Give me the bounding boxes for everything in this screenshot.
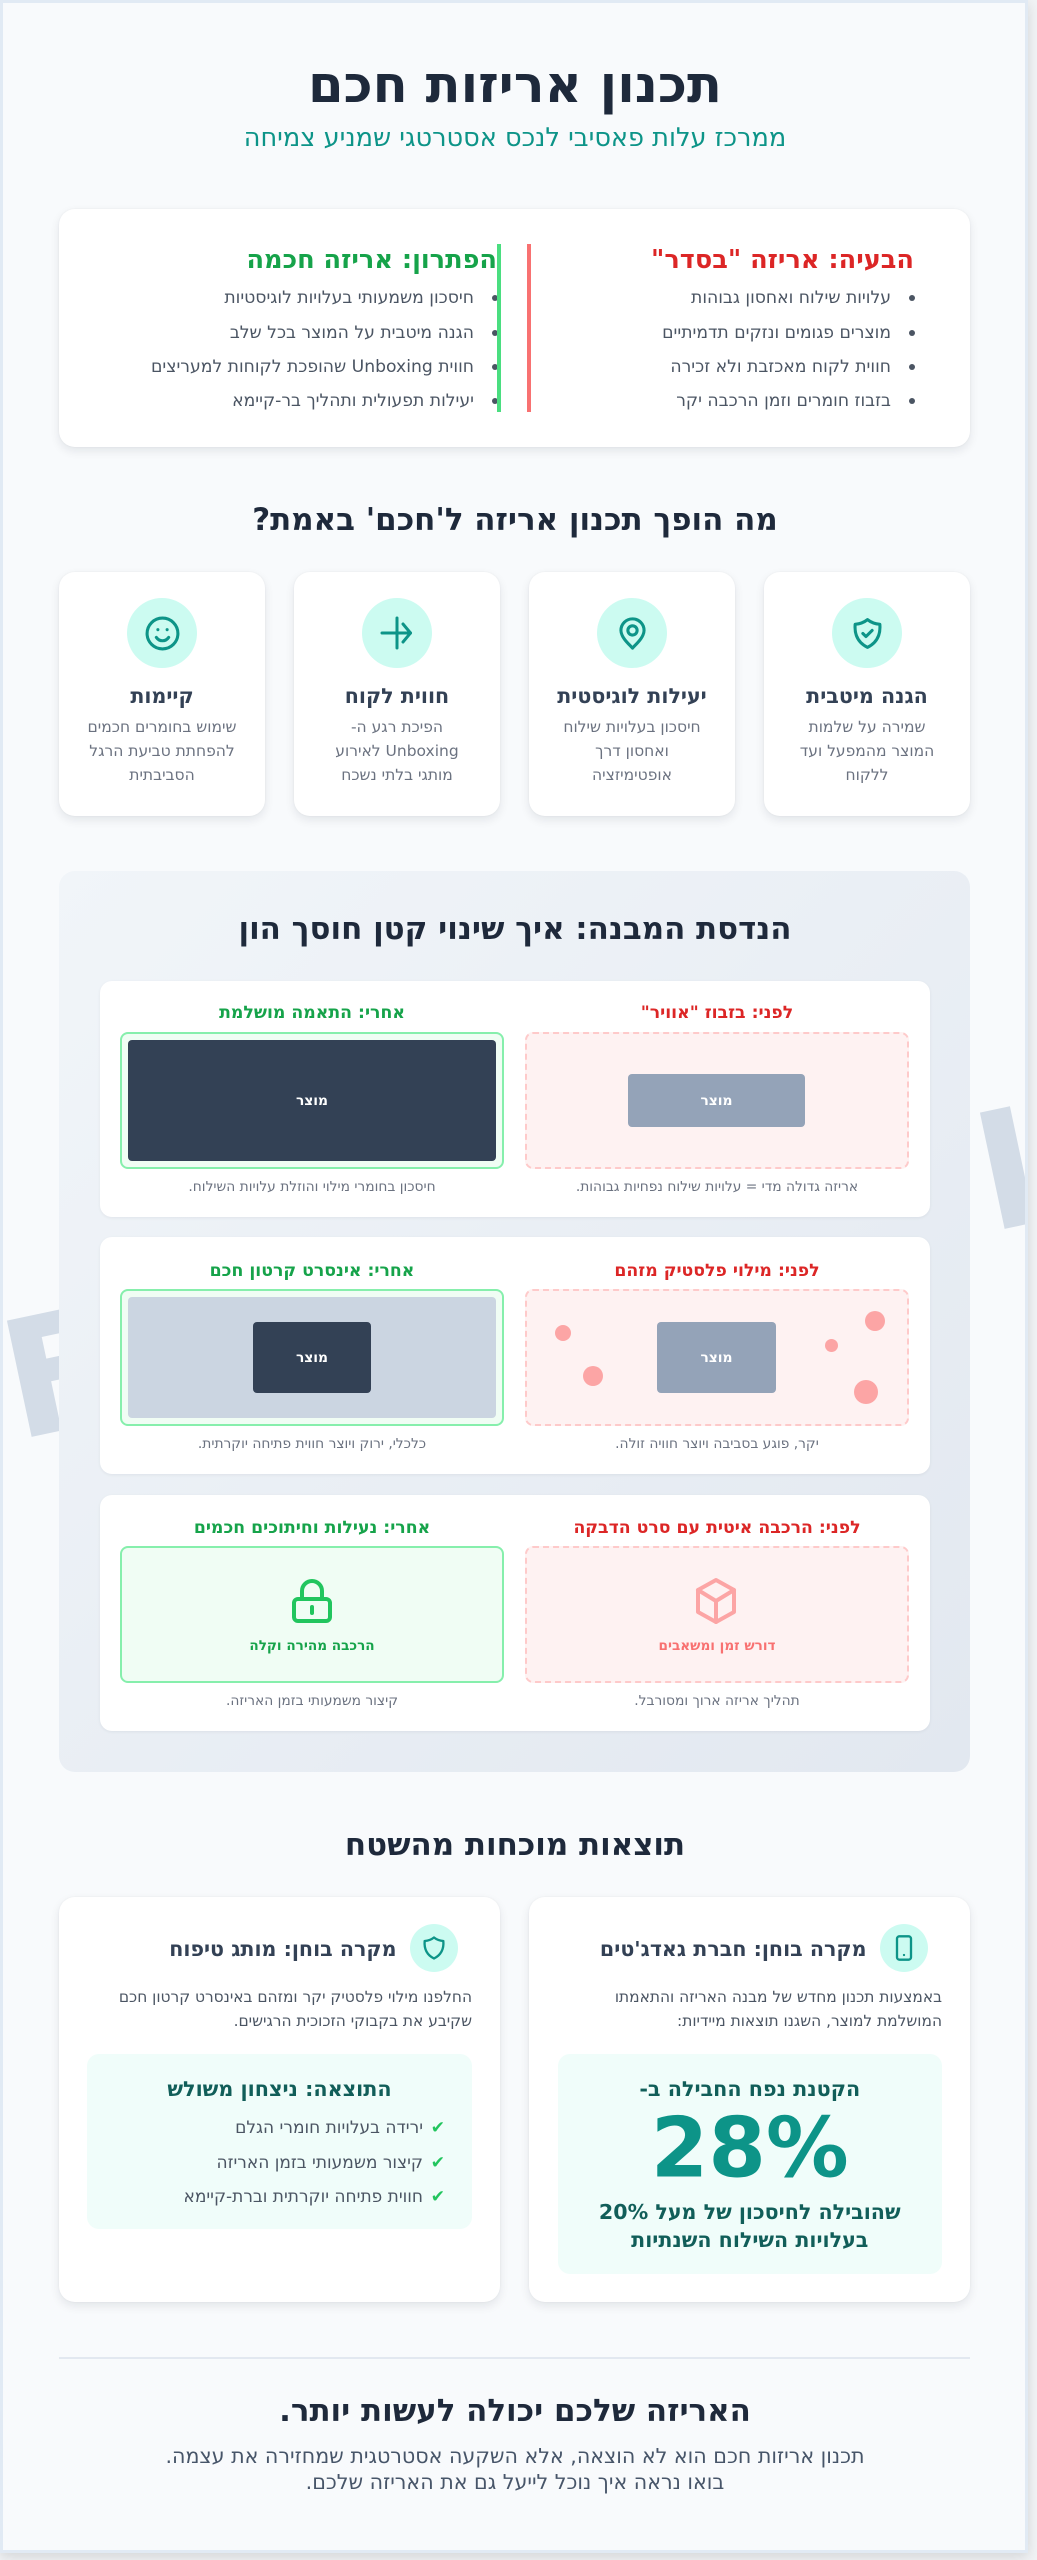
- title: תכנון אריזות חכם: [308, 55, 722, 115]
- card title: חווית לקוח: [345, 684, 449, 708]
- comparison row 3: [100, 1495, 930, 1732]
- divider: problem: [527, 244, 531, 412]
- card: logistics: ואחסון דרך: [595, 742, 669, 760]
- card title: קיימות: [130, 684, 194, 708]
- case study: cosmetics: שקיבע את בקבוקי הזכוכית הרגישים.: [234, 2012, 472, 2030]
- heading: results: תוצאות מוכחות מהשטח: [345, 1827, 685, 1863]
- footer text: תכנון אריזות חכם הוא לא הוצאה, אלא השקעה אסטרטגית שמחזירה את עצמה.: [165, 2444, 865, 2468]
- case text: באמצעות תכנון מחדש של מבנה האריזה והתאמתו: [615, 1988, 942, 2006]
- card text: הפיכת רגע ה-: [351, 718, 443, 736]
- card text: חיסכון בעלויות שילוח: [563, 718, 701, 736]
- before caption: אריזה גדולה מדי = עלויות שילוח נפחיות גבוהות.: [576, 1179, 858, 1195]
- card: customer experience: מותגי בלתי נשכח: [341, 766, 453, 784]
- case study: cosmetics: [59, 1897, 500, 2302]
- before box: [525, 1546, 909, 1683]
- after caption: קיצור משמעותי בזמן האריזה.: [226, 1693, 398, 1709]
- big number: 28%: [651, 2100, 849, 2196]
- icon: shield check: [832, 598, 902, 668]
- before box: [525, 1032, 909, 1169]
- before caption: תהליך אריזה ארוך ומסורבל.: [634, 1693, 800, 1709]
- icon: lock: [292, 1579, 332, 1623]
- problem column: חווית לקוח מאכזבת ולא זכירה: [670, 357, 891, 377]
- problem column: [527, 244, 915, 412]
- card: customer experience: Unboxing לאירוע: [335, 742, 459, 760]
- cardboard insert: [128, 1297, 496, 1418]
- after product: מוצר: [296, 1092, 328, 1108]
- result box: [558, 2054, 942, 2274]
- problem bullets: עלויות שילוח ואחסון גבוהות: [691, 288, 891, 308]
- after product: [128, 1040, 496, 1161]
- card: protection: ללקוח: [846, 766, 888, 784]
- result box: בעלויות השילוח השנתיות: [631, 2228, 868, 2252]
- result box: ירידה בעלויות חומרי הגלם: [235, 2118, 423, 2138]
- solution column: [151, 244, 501, 412]
- row 1 background: [100, 981, 930, 1217]
- subtitle: ממרכז עלות פאסיבי לנכס אסטרטגי שמניע צמיחה: [244, 123, 786, 153]
- before product: מוצר: [700, 1350, 733, 1366]
- after caption: חיסכון בחומרי מילוי והוזלת עלויות השילוח.: [188, 1179, 436, 1195]
- card: logistics: אופטימיזציה: [592, 766, 672, 784]
- problem heading: הבעיה: אריזה "בסדר": [651, 245, 914, 275]
- result box: ✔: [431, 2187, 445, 2207]
- row 3 background: [100, 1495, 930, 1731]
- solution column: יעילות תפעולית ותהליך בר-קיימא: [232, 391, 474, 411]
- footer text: בואו נראה איך נוכל לייעל גם את האריזה שלכם.: [306, 2470, 724, 2494]
- after box: [120, 1546, 504, 1683]
- icon: phone: [880, 1924, 928, 1972]
- comparison row 2: [100, 1237, 930, 1474]
- card text: שימוש בחומרים חכמים: [88, 718, 236, 736]
- card: sustainability: הסביבתית: [129, 766, 195, 784]
- before heading: לפני: בזבוז "אוויר": [641, 1003, 793, 1023]
- card: protection: [764, 572, 970, 816]
- after caption: כלכלי, ירוק ויוצר חווית פתיחה יוקרתית.: [198, 1436, 426, 1452]
- before box: [525, 1289, 909, 1426]
- before heading: לפני: מילוי פלסטיק מזהם: [614, 1261, 820, 1281]
- result text: שהובילה לחיסכון של מעל 20%: [599, 2200, 901, 2224]
- result box: [87, 2054, 472, 2229]
- before heading: לפני: הרכבה איטית עם סרט הדבקה: [573, 1518, 861, 1538]
- panel: structure engineering: [59, 871, 970, 1772]
- problem column: בזבוז חומרים וזמן הרכבה יקר: [676, 391, 891, 411]
- card title: יעילות לוגיסטית: [557, 684, 707, 708]
- solution column: הגנה מיטבית על המוצר בכל שלב: [230, 323, 474, 343]
- heading: what makes it smart: מה הופך תכנון אריזה ל'חכם' באמת?: [252, 502, 778, 538]
- result box: ✔: [431, 2153, 445, 2173]
- result box: חווית פתיחה יוקרתית וברת-קיימא: [183, 2187, 423, 2207]
- result heading: הקטנת נפח החבילה ב-: [639, 2077, 860, 2101]
- case study: gadgets: [529, 1897, 970, 2302]
- icon: shield: [410, 1924, 458, 1972]
- panel: problem and solution: [59, 209, 970, 447]
- result heading: התוצאה: ניצחון משולש: [167, 2077, 392, 2101]
- after box: [120, 1032, 504, 1169]
- before product: [628, 1074, 805, 1127]
- card: sustainability: להפחתת טביעת הרגל: [89, 742, 235, 760]
- before label: דורש זמן ומשאבים: [658, 1638, 776, 1654]
- case study: gadgets: המושלמת למוצר, השגנו תוצאות מיידיות:: [677, 2012, 942, 2030]
- before product: מוצר: [700, 1092, 733, 1108]
- after label: הרכבה מהירה וקלה: [249, 1638, 375, 1654]
- card: customer experience: [294, 572, 500, 816]
- plastic filler pellets: [865, 1311, 885, 1331]
- icon: arrow: [362, 598, 432, 668]
- footer divider line: [59, 2357, 970, 2359]
- result checklist: ✔: [431, 2118, 445, 2138]
- card: protection: המוצר מהמפעל ועד: [800, 742, 934, 760]
- comparison row 1: [100, 981, 930, 1218]
- card text: שמירה על שלמות: [809, 718, 925, 736]
- before product: [657, 1322, 776, 1393]
- footer heading: האריזה שלכם יכולה לעשות יותר.: [279, 2393, 751, 2429]
- solution heading: הפתרון: אריזה חכמה: [246, 245, 497, 275]
- after heading: אחרי: נעילות וחיתוכים חכמים: [194, 1518, 430, 1538]
- after box: [120, 1289, 504, 1426]
- card: sustainability: [59, 572, 265, 816]
- card title: הגנה מיטבית: [806, 684, 928, 708]
- heading: structure engineering: הנדסת המבנה: איך שינוי קטן חוסך הון: [238, 911, 792, 947]
- divider: solution: [497, 244, 501, 412]
- card: logistics: [529, 572, 735, 816]
- after heading: אחרי: אינסרט קרטון חכם: [210, 1261, 414, 1281]
- case text: החלפנו מילוי פלסטיק יקר ומזהם באינסרט קרטון חכם: [119, 1988, 472, 2006]
- solution column: חווית Unboxing שהופכת לקוחות למעריצים: [151, 357, 474, 377]
- after product: [253, 1322, 371, 1393]
- after heading: אחרי: התאמה מושלמת: [219, 1003, 405, 1023]
- icon: smile: [127, 598, 197, 668]
- footer text: [165, 2444, 865, 2494]
- icon: map pin: [597, 598, 667, 668]
- problem column: מוצרים פגומים ונזקים תדמיתיים: [662, 323, 891, 343]
- result box: קיצור משמעותי בזמן האריזה: [216, 2153, 423, 2173]
- solution bullets: חיסכון משמעותי בעלויות לוגיסטיות: [224, 288, 474, 308]
- before caption: יקר, פוגע בסביבה ויוצר חוויה זולה.: [615, 1436, 819, 1452]
- case title: מקרה בוחן: מותג טיפוח: [169, 1937, 396, 1961]
- icon: box: [696, 1578, 736, 1624]
- after product: מוצר: [296, 1350, 328, 1366]
- row 2 background: [100, 1237, 930, 1474]
- case title: מקרה בוחן: חברת גאדג'טים: [600, 1937, 866, 1961]
